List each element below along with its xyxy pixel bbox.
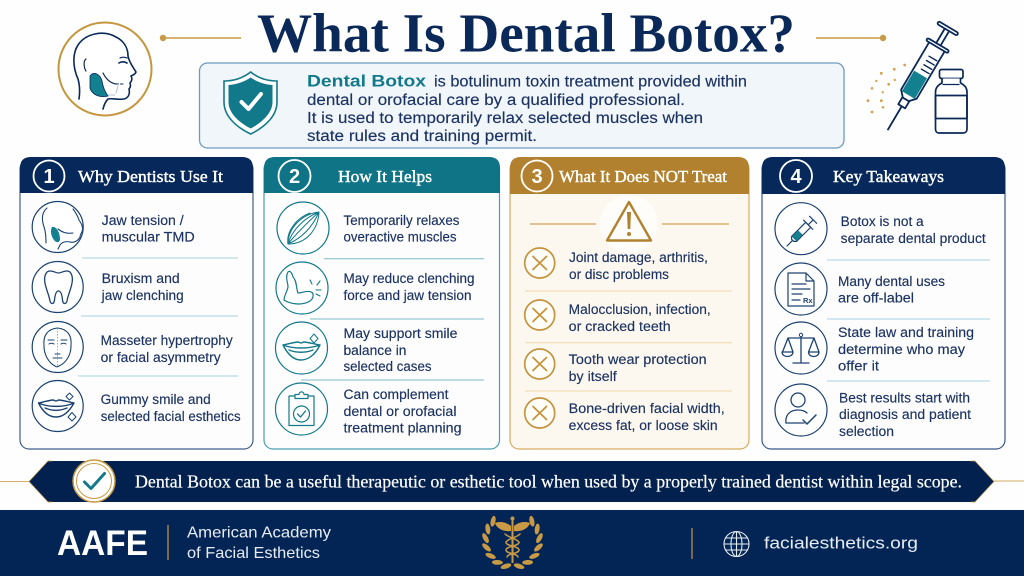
- intro text: [307, 72, 747, 145]
- intro text: state rules and training permit.: [307, 128, 537, 145]
- text: clenching force: [344, 271, 474, 303]
- heading 4: Key Takeaways: [833, 167, 944, 186]
- decorative title rule: left: [160, 35, 241, 41]
- text: bone-driven width: Bone-driven facial width,: [569, 401, 725, 416]
- panel 4: key takeaways: [762, 157, 1005, 449]
- number 2: [278, 160, 310, 192]
- text: off-label: [838, 274, 945, 306]
- icon: prescription document: [775, 263, 827, 315]
- text: off-label: are off-label: [838, 290, 914, 306]
- panel 2: how it helps: [264, 157, 500, 449]
- card 4 body: [762, 160, 1005, 449]
- text: best results: [839, 390, 971, 439]
- icon: small syringe: [775, 203, 827, 255]
- text: jaw tension: [102, 213, 195, 244]
- text: treatment planning: Can complement: [344, 387, 449, 402]
- card 3 body: [510, 160, 749, 449]
- icon: clipboard with check: [276, 383, 328, 435]
- card 2 header: [264, 157, 500, 193]
- website: facialesthetics.org: [764, 534, 918, 552]
- text: bruxism: jaw clenching: [101, 288, 184, 303]
- text: joint damage: or disc problems: [569, 267, 669, 282]
- title: What Is Dental Botox?: [257, 2, 795, 64]
- panel 1: why dentists use it: [20, 157, 253, 449]
- callout text: Dental Botox can be a useful therapeutic or esthetic tool when used by a properly trained dentist within legal scope.: [135, 472, 962, 492]
- text: smile balance: balance in: [344, 343, 406, 358]
- text: treatment planning: treatment planning: [344, 420, 462, 436]
- text: best results: Best results start with: [839, 390, 970, 406]
- number 2: 2: [289, 166, 300, 188]
- number 3: 3: [531, 166, 543, 188]
- icon: scales of justice: [775, 322, 827, 374]
- intro text: dental or orofacial care by a qualified professional.: [307, 92, 685, 109]
- emblem: caduceus and laurel: [480, 514, 545, 572]
- icon: check badge: [73, 460, 115, 502]
- number 4: 4: [790, 166, 802, 188]
- icon: globe: [724, 532, 749, 556]
- text: bone-driven width: [569, 401, 725, 433]
- icon: head with masseter muscle: [58, 22, 152, 116]
- text: smile balance: [344, 326, 458, 374]
- icon: patient with check: [775, 384, 827, 436]
- text: treatment planning: dental or orofacial: [344, 404, 456, 419]
- organisation name: [187, 524, 331, 562]
- text: bruxism: Bruxism and: [102, 271, 180, 286]
- text: bone-driven width: excess fat, or loose skin: [569, 418, 718, 433]
- number 1: [34, 160, 64, 192]
- text: relaxes muscles: Temporarily relaxes: [344, 213, 460, 228]
- text: state law: offer it: [838, 358, 879, 374]
- text: masseter: [101, 333, 233, 365]
- text: best results: selection: [839, 424, 894, 439]
- decorative title rule: right: [816, 35, 886, 41]
- text: not a separate product: Botox is not a: [841, 214, 924, 229]
- text: masseter: Masseter hypertrophy: [101, 333, 233, 348]
- icon: muscle fibres: [277, 202, 329, 254]
- icon: x mark 1: [525, 248, 555, 278]
- organisation name: of Facial Esthetics: [187, 545, 320, 562]
- text: jaw tension: muscular TMD: [102, 230, 195, 244]
- text: jaw tension: Jaw tension /: [102, 213, 184, 228]
- text: malocclusion: [569, 302, 711, 334]
- icon: smile with sparkles: [32, 380, 83, 432]
- panel: intro definition: [200, 63, 844, 148]
- text: joint damage: [569, 250, 708, 282]
- icon: tooth: [32, 262, 83, 312]
- intro text: It is used to temporarily relax selected muscles when: [307, 110, 703, 127]
- text: not a separate product: separate dental product: [841, 231, 986, 246]
- text: state law: determine who may: [838, 342, 965, 357]
- card 1 header: [20, 157, 253, 193]
- text: state law: [838, 325, 974, 374]
- text: bruxism: [101, 271, 184, 303]
- text: best results: diagnosis and patient: [839, 407, 971, 422]
- icon: x mark 3: [525, 349, 555, 379]
- text: malocclusion: Malocclusion, infection,: [569, 302, 711, 317]
- text: masseter: or facial asymmetry: [101, 350, 221, 365]
- number 3: [522, 160, 552, 192]
- icon: face symmetry: [32, 322, 83, 372]
- intro text: is botulinum toxin treatment provided within: [434, 74, 747, 90]
- text: malocclusion: or cracked teeth: [569, 319, 671, 334]
- icon: flexed arm: [276, 262, 328, 314]
- text: off-label: Many dental uses: [838, 274, 945, 289]
- footer: [0, 510, 1024, 576]
- icon: syringe, sparkle dots and vial: [867, 21, 967, 136]
- text: joint damage: Joint damage, arthritis,: [569, 250, 708, 265]
- icon: x mark 2: [525, 300, 555, 330]
- text: clenching force: May reduce clenching: [344, 271, 474, 286]
- icon: prescription document: Rx: [803, 296, 813, 305]
- logo: AAFE: AAFE: [57, 524, 148, 563]
- text: gummy smile: selected facial esthetics: [101, 409, 241, 424]
- text: clenching force: force and jaw tension: [344, 288, 472, 303]
- card 4 header: [762, 157, 1005, 194]
- text: state law: State law and training: [838, 325, 974, 340]
- card 2 body: [264, 160, 500, 449]
- intro text: Dental Botox: [307, 72, 427, 90]
- text: treatment planning: [344, 387, 462, 436]
- organisation name: American Academy: [187, 524, 331, 542]
- text: tooth wear: by itself: [569, 369, 617, 384]
- heading 3: What It Does NOT Treat: [559, 167, 727, 186]
- text: gummy smile: [101, 392, 241, 424]
- text: tooth wear: [569, 352, 707, 384]
- icon: jaw muscle: [32, 202, 83, 252]
- text: tooth wear: Tooth wear protection: [569, 352, 707, 367]
- card 3 header: [510, 157, 749, 194]
- text: smile balance: selected cases: [344, 359, 432, 374]
- icon: x mark 4: [525, 398, 555, 428]
- text: gummy smile: Gummy smile and: [101, 392, 211, 407]
- number 1: 1: [43, 166, 55, 188]
- text: relaxes muscles: [344, 213, 460, 244]
- icon: smile balance: [276, 322, 328, 374]
- heading 2: How It Helps: [338, 167, 432, 186]
- text: smile balance: May support smile: [344, 326, 458, 341]
- heading 1: Why Dentists Use It: [78, 167, 223, 186]
- card 1 body: [20, 160, 253, 449]
- text: relaxes muscles: overactive muscles: [344, 230, 457, 244]
- panel 3: what it does not treat: [510, 157, 749, 449]
- callout banner: [0, 460, 1024, 502]
- number 4: [780, 160, 812, 192]
- text: not a separate product: [841, 214, 986, 246]
- icon: warning triangle: [530, 195, 729, 253]
- icon: shield with check: [224, 72, 277, 134]
